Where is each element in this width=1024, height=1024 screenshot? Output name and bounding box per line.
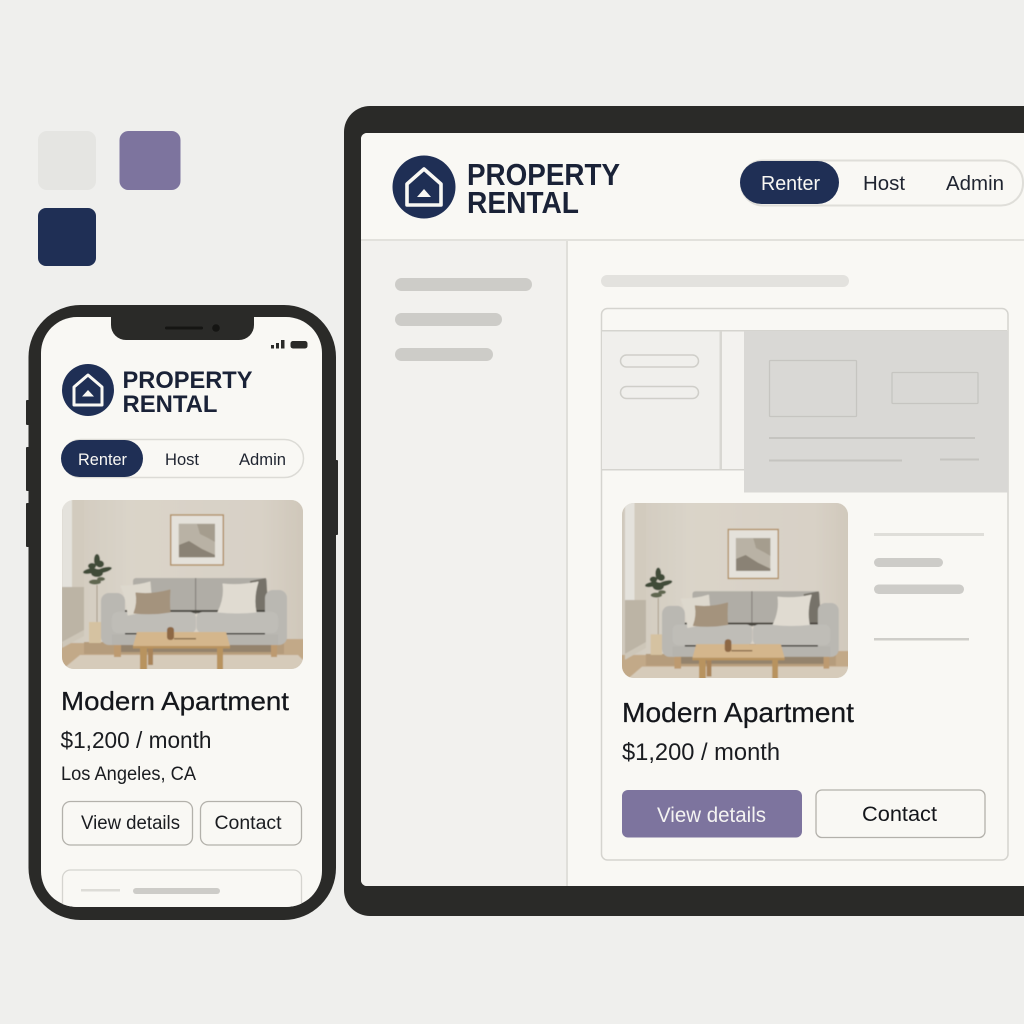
phone role switcher: Host: [165, 451, 199, 469]
page title placeholder: [601, 275, 849, 287]
tablet logo wordmark: RENTAL: [467, 185, 579, 220]
phone logo icon: [62, 364, 114, 416]
button: view details: [622, 790, 802, 838]
phone button: view details: View details: [81, 812, 180, 834]
phone listing location: Los Angeles, CA: [61, 764, 196, 785]
phone listing title: Modern Apartment: [61, 686, 290, 716]
phone button: contact: [200, 802, 302, 845]
phone logo wordmark: PROPERTY: [122, 367, 252, 394]
tablet logo wordmark: PROPERTY: [467, 157, 620, 192]
phone notch: [111, 315, 254, 340]
wireframe left panel: [602, 330, 1007, 470]
phone role switcher: Admin: [239, 451, 286, 469]
listing photo: [622, 503, 848, 678]
phone listing photo: [62, 500, 303, 669]
colour swatches: [38, 131, 180, 266]
button: view details: View details: [657, 803, 766, 827]
listing price: $1,200 / month: [622, 739, 780, 766]
button: contact: [816, 790, 985, 838]
phone logo wordmark: RENTAL: [122, 391, 218, 418]
phone device: [26, 305, 338, 930]
listing card: [602, 308, 1008, 860]
phone button: view details: [62, 802, 192, 845]
placeholder detail lines: [874, 533, 984, 640]
phone screen: [41, 315, 322, 930]
wireframe grey panel: [744, 331, 1008, 492]
phone listing price: $1,200 / month: [60, 727, 212, 753]
tablet role switcher: Renter: [761, 172, 820, 195]
tablet header: [361, 133, 1024, 241]
phone side buttons: [26, 400, 338, 547]
tablet sidebar: [361, 241, 568, 886]
tablet device: [344, 106, 1024, 916]
swatch: purple: [120, 131, 180, 190]
tablet logo wordmark: [468, 164, 620, 213]
swatch: light grey: [38, 131, 96, 190]
phone role switcher: Renter: [78, 451, 127, 469]
tablet role switcher: Admin: [946, 172, 1004, 195]
phone button: contact: Contact: [214, 812, 282, 834]
phone frame: [28, 305, 336, 920]
button: contact: Contact: [862, 802, 937, 826]
listing title: Modern Apartment: [622, 697, 854, 728]
tablet screen: [361, 133, 1024, 886]
tablet role switcher: Host: [863, 172, 905, 195]
swatch: navy: [38, 208, 96, 266]
phone role switcher: [61, 440, 304, 478]
next listing card peek: [62, 869, 302, 907]
tablet frame: [344, 106, 1024, 916]
phone logo wordmark: [124, 371, 252, 412]
tablet role switcher: [740, 160, 1023, 206]
status icons: [271, 340, 308, 348]
tablet logo icon: [392, 156, 456, 218]
